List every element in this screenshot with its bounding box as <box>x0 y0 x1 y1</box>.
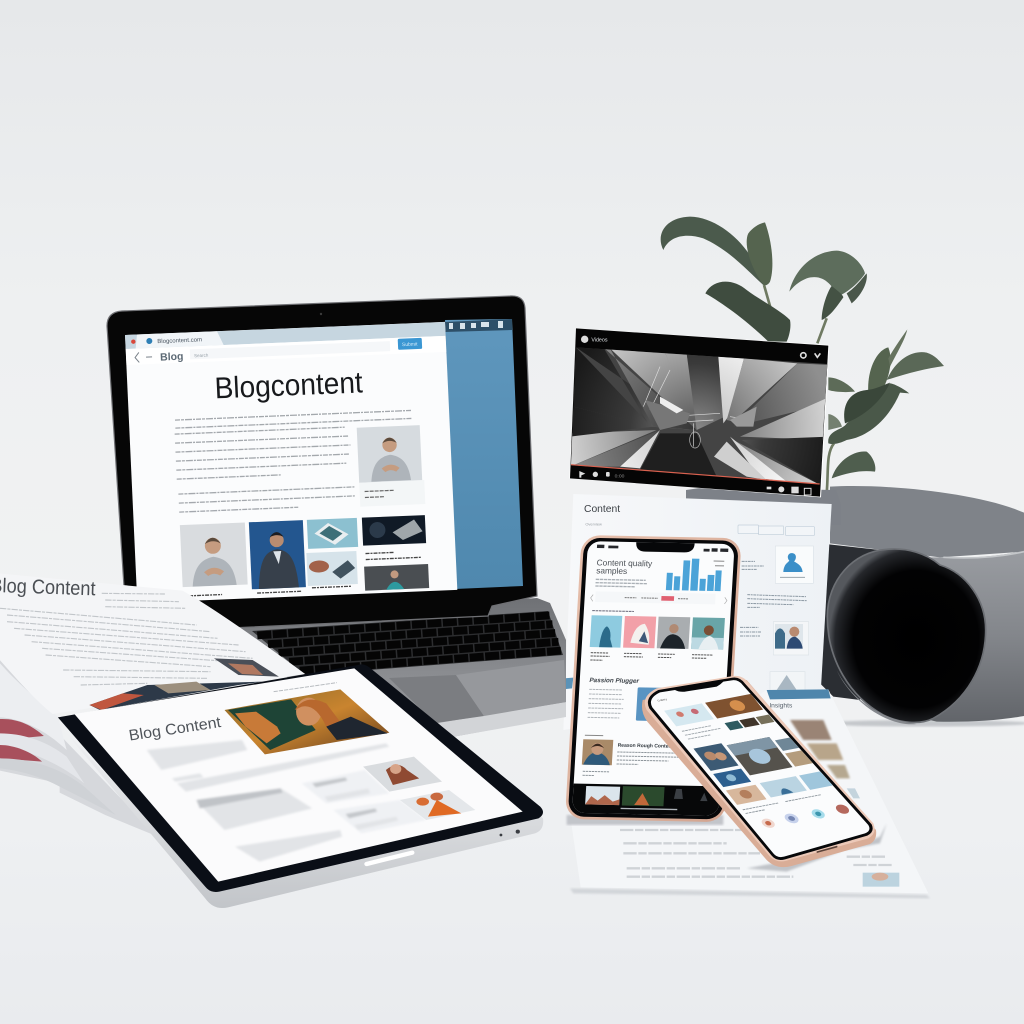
paper shadow <box>570 888 930 898</box>
pale photo <box>664 703 714 726</box>
paper thumbnail <box>863 873 899 887</box>
leaf: middle <box>822 286 843 320</box>
progress bar <box>571 465 820 484</box>
top controls <box>801 353 820 358</box>
player frame <box>570 328 828 497</box>
sheet buttons <box>738 525 815 535</box>
paper photo 4 <box>847 788 860 798</box>
cylinder bright seam <box>943 552 1024 558</box>
tablet ports <box>500 830 520 836</box>
small plant pot <box>686 488 841 525</box>
leaf: behind video upper <box>828 377 855 392</box>
paper photos <box>790 720 832 740</box>
leaf: behind video lower <box>828 414 842 430</box>
browser tab bar <box>125 322 446 349</box>
leaf: right branch tall <box>868 347 891 400</box>
tablet bezel <box>58 664 543 892</box>
playback controls <box>579 471 610 478</box>
thumb: pink <box>623 616 656 648</box>
phone heading: Content quality <box>596 557 653 568</box>
phone bezel <box>648 678 873 860</box>
icon card <box>775 546 813 583</box>
globe photo <box>727 737 793 775</box>
tilted phone <box>642 676 887 872</box>
tablet <box>58 664 543 908</box>
photo: man in blue <box>249 520 306 589</box>
tablet home button <box>367 853 412 864</box>
stack red page 1 <box>0 719 44 740</box>
laptop lid <box>107 296 537 628</box>
tablet portrait 1 <box>363 757 442 792</box>
floor shadow <box>823 720 1024 727</box>
right thumb 1 <box>775 736 803 751</box>
right thumb 2 <box>785 750 815 767</box>
stack page 3 <box>0 758 116 815</box>
blue corner band <box>563 678 573 689</box>
window close dot <box>131 339 136 344</box>
phone side frame <box>642 680 876 867</box>
cylinder body <box>887 551 1024 722</box>
leaf: under upper right <box>847 273 867 303</box>
paper photo 3 <box>827 765 850 778</box>
content document sheet <box>563 494 832 730</box>
player logo <box>581 336 588 343</box>
page background <box>125 322 457 603</box>
paper blurred text <box>620 830 893 877</box>
magazine text block <box>0 593 253 685</box>
tablet silver body <box>58 723 543 908</box>
address bar <box>126 336 446 365</box>
cylinder left shade <box>820 543 880 700</box>
leaf: upper right <box>789 251 865 296</box>
action button: Submit <box>402 342 418 348</box>
speaker port <box>817 847 837 852</box>
bottom caption lines <box>743 795 824 813</box>
story circles <box>759 803 851 829</box>
photo: notebooks <box>306 551 358 586</box>
video rays image <box>571 348 828 484</box>
caption lines <box>682 724 724 739</box>
photo: person reading <box>362 515 426 546</box>
small thumbs <box>725 715 774 730</box>
lower card <box>770 672 805 692</box>
tilted phone shadow <box>747 823 887 872</box>
phone frame <box>565 535 742 822</box>
leaf: upright <box>747 222 772 285</box>
magazine wide image <box>89 682 263 710</box>
section label 2 <box>585 734 603 737</box>
right controls <box>767 486 811 495</box>
blue thumb <box>799 770 836 790</box>
phone front frame <box>645 676 875 861</box>
grey cylinder object <box>820 486 1024 727</box>
printed magazine <box>0 573 305 837</box>
phone nav row <box>590 594 728 604</box>
search <box>190 341 390 359</box>
orange photo <box>705 694 763 718</box>
video title: Videos <box>591 338 608 344</box>
dock thumb 2 <box>622 786 665 806</box>
phone dark dock <box>565 783 727 820</box>
portrait text <box>583 751 679 777</box>
photo: tablet devices <box>307 518 358 549</box>
notch <box>636 542 695 552</box>
pot rim <box>686 488 841 525</box>
laptop <box>107 296 566 737</box>
dock thumb 1 <box>585 786 620 805</box>
tablet blurred text blocks <box>147 740 426 862</box>
cylinder top surface <box>830 486 1024 557</box>
lower paper sheet <box>569 689 930 898</box>
trackpad <box>389 675 484 723</box>
site logo: Blog <box>160 351 184 364</box>
dock icons <box>674 789 708 801</box>
sidebar blue panel <box>445 319 523 589</box>
leaf: big lower back <box>844 383 890 423</box>
magazine thumbnail <box>214 658 279 677</box>
section body lines <box>588 689 624 718</box>
sheet title: Content <box>584 504 620 515</box>
tablet portrait 2 <box>400 790 475 820</box>
paper <box>569 689 928 893</box>
article body text <box>174 410 416 512</box>
browser tab <box>135 331 224 349</box>
leaf: right branch tip <box>888 329 907 367</box>
photo: man standing <box>180 522 248 587</box>
chart legend <box>713 561 724 566</box>
heading text lines <box>595 579 647 587</box>
stack page 1 <box>0 663 67 750</box>
magazine page stack <box>0 660 158 837</box>
beige photo <box>726 785 767 805</box>
leaf: lower left <box>705 282 790 342</box>
phone bezel <box>568 538 739 819</box>
caption lines <box>187 551 422 596</box>
browser window <box>125 322 457 603</box>
sheet <box>563 494 832 730</box>
sidebar top icons <box>445 319 512 332</box>
webcam <box>320 313 322 315</box>
paper blue header <box>767 689 831 699</box>
paper heading: Insights <box>769 702 793 709</box>
tablet header text <box>274 683 337 692</box>
portrait <box>582 739 613 765</box>
video timestamp: 0:00 <box>615 474 625 480</box>
opening base rim <box>837 670 917 724</box>
laptop front lip <box>438 702 566 737</box>
section title: Passion Plugger <box>589 677 640 685</box>
search text: Search <box>194 353 209 358</box>
sky photo <box>760 776 807 797</box>
leaf: right branch long <box>887 352 944 380</box>
sheet subtitle: Overview <box>585 521 602 526</box>
laptop base <box>230 598 566 737</box>
stack red page 2 <box>0 745 42 762</box>
magazine top page <box>0 573 305 714</box>
tab title: Blogcontent.com <box>157 337 202 345</box>
laptop palm rest <box>456 660 566 716</box>
thumb: bird <box>590 615 622 648</box>
plant <box>661 217 944 493</box>
paper photo 2 <box>807 743 843 760</box>
cylinder opening <box>827 549 986 722</box>
tab favicon <box>146 338 152 344</box>
tablet hero image <box>225 689 389 754</box>
tablet title: Blog Content <box>128 714 223 745</box>
section label <box>592 610 634 612</box>
status icons <box>597 545 728 552</box>
leaf: bottom <box>832 452 875 478</box>
video player panel <box>567 328 833 497</box>
bar chart <box>666 558 722 591</box>
blue block <box>636 687 674 721</box>
panel shadow and side <box>569 328 829 497</box>
keyboard <box>252 611 563 675</box>
nav arrows <box>135 352 152 363</box>
photo: woman teal <box>364 564 429 593</box>
home bar <box>621 808 677 810</box>
phone subheading: samples <box>596 565 628 576</box>
stack page 2 <box>0 733 84 783</box>
phone screen <box>572 541 735 816</box>
action button <box>398 338 422 350</box>
phone shadow <box>567 815 723 825</box>
tablet screen <box>74 668 523 882</box>
photo: man portrait <box>356 425 422 498</box>
text lines on sheet <box>740 561 807 636</box>
leaf: top left <box>661 217 763 285</box>
leaf: big lower <box>828 383 909 444</box>
thumb captions <box>590 653 713 662</box>
phone screen <box>651 680 869 857</box>
page title: Blogcontent <box>214 366 364 405</box>
thumbnail face <box>228 663 263 675</box>
couple photo <box>693 743 739 771</box>
thumb: man dark <box>657 617 690 649</box>
plant stems <box>764 285 834 493</box>
upright phone <box>565 535 742 825</box>
portrait heading: Reason Rough Contents <box>617 743 676 750</box>
blue photo <box>713 769 751 787</box>
photo card <box>773 622 809 655</box>
top label text: Gallery <box>656 697 669 702</box>
thumb: woman teal <box>691 617 725 650</box>
